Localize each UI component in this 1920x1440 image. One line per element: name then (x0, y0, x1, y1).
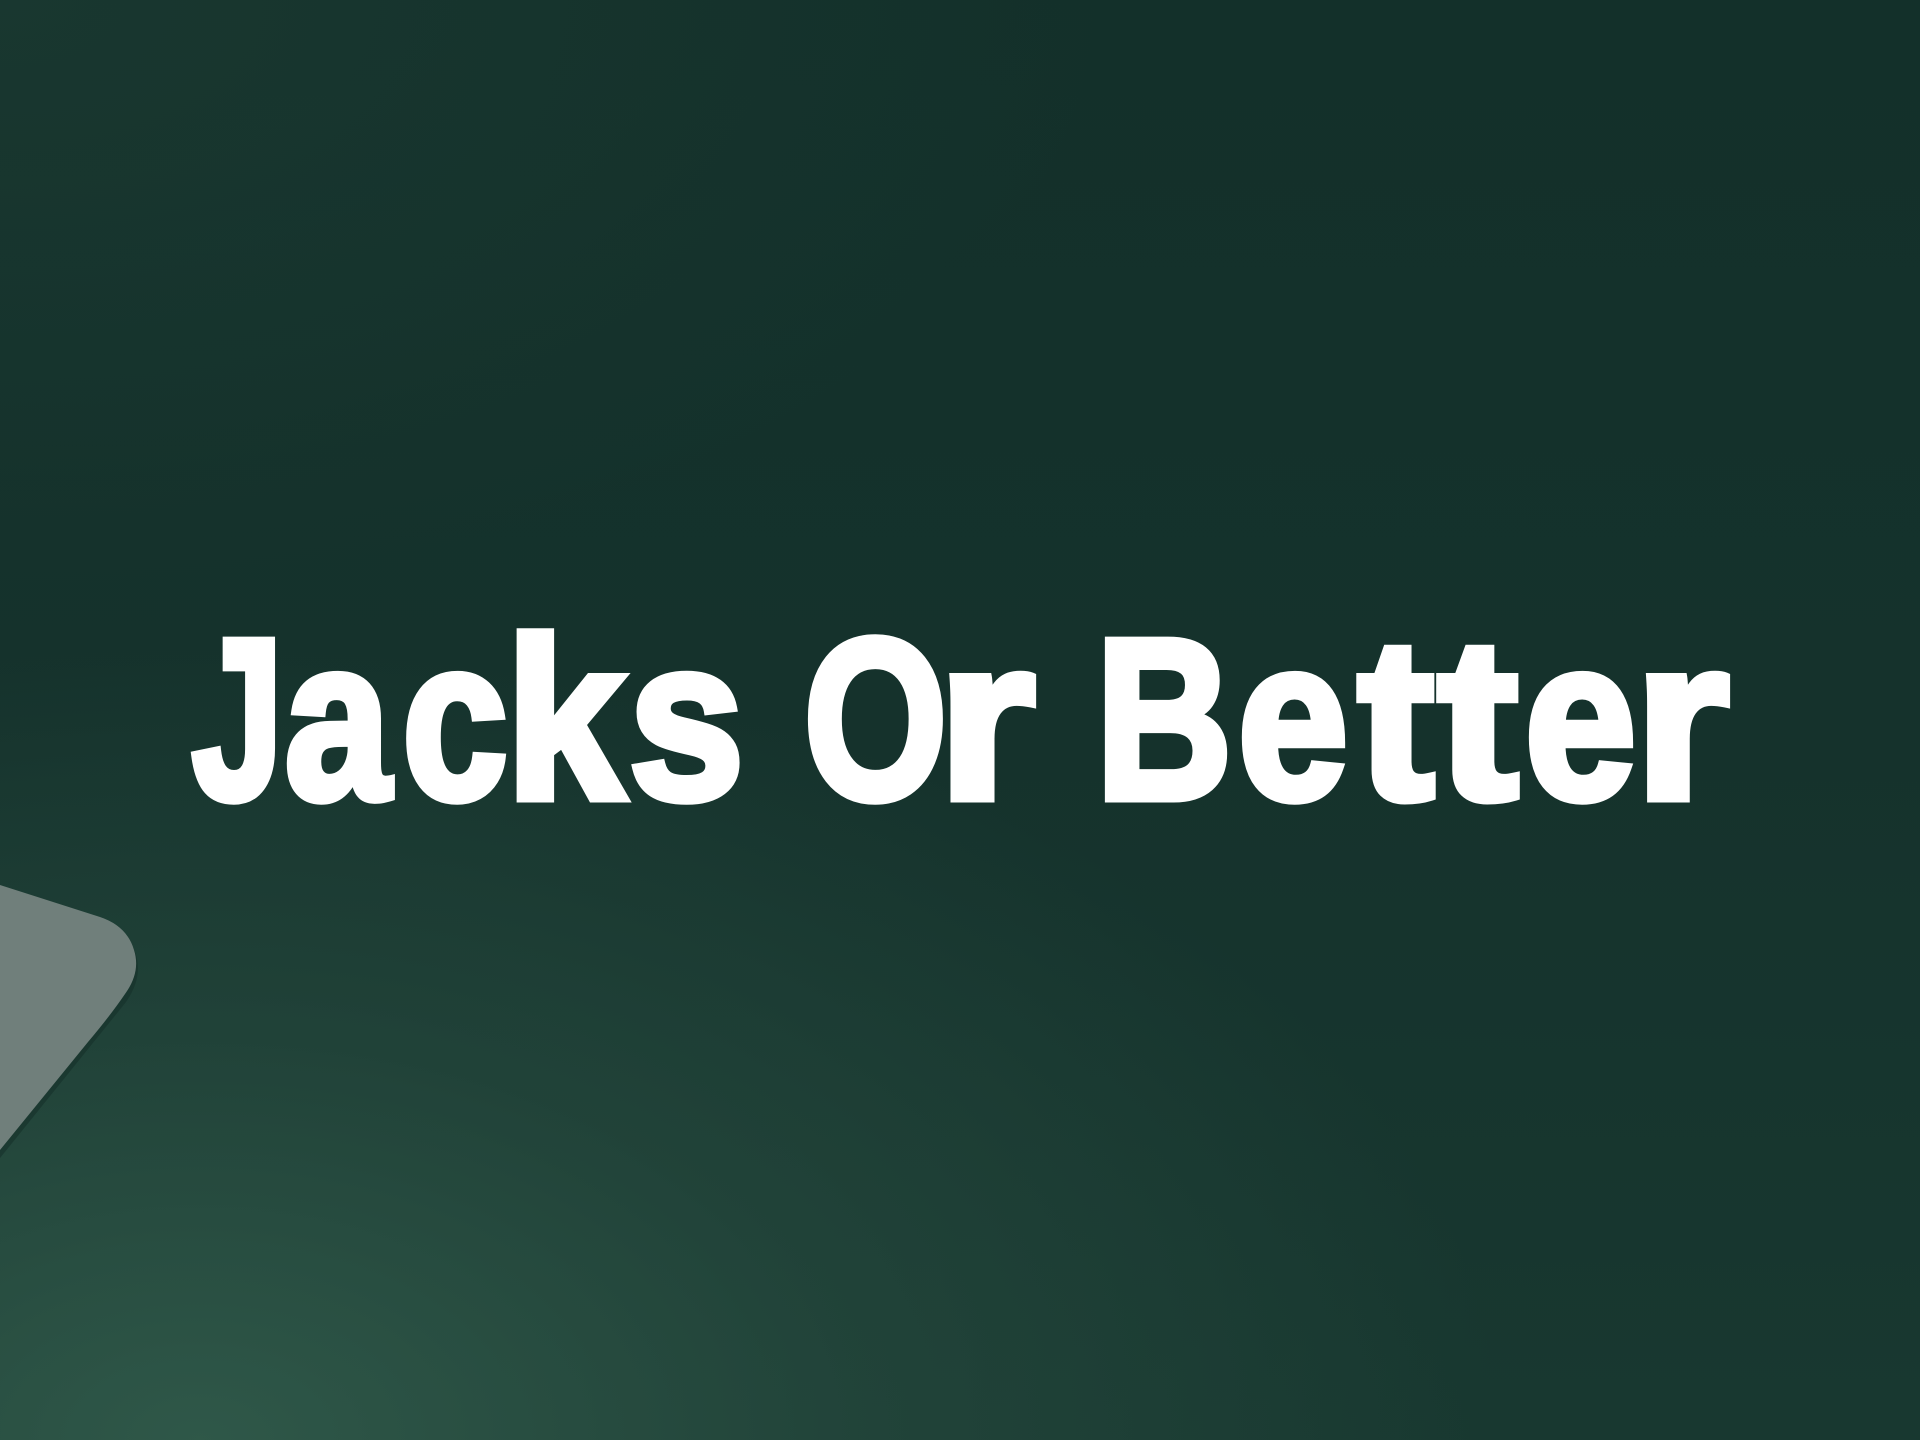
title: Jacks Or Better: e (1238, 593, 1348, 847)
title: Jacks Or Better: e (1525, 593, 1636, 847)
title: Jacks Or Better: t (1358, 593, 1434, 847)
title: Jacks Or Better: a (285, 593, 392, 847)
title: Jacks Or Better: O (804, 593, 947, 847)
title: Jacks Or Better: J (192, 593, 283, 847)
title: Jacks Or Better: k (506, 593, 625, 847)
title: Jacks Or Better: c (402, 593, 508, 847)
title: Jacks Or Better: r (1635, 593, 1729, 847)
title: Jacks Or Better: s (629, 593, 744, 847)
card corner at left edge (0, 885, 138, 1158)
title: Jacks Or Better: r (938, 593, 1035, 847)
title: Jacks Or Better: t (1438, 593, 1518, 847)
title: Jacks Or Better: B (1096, 593, 1232, 847)
